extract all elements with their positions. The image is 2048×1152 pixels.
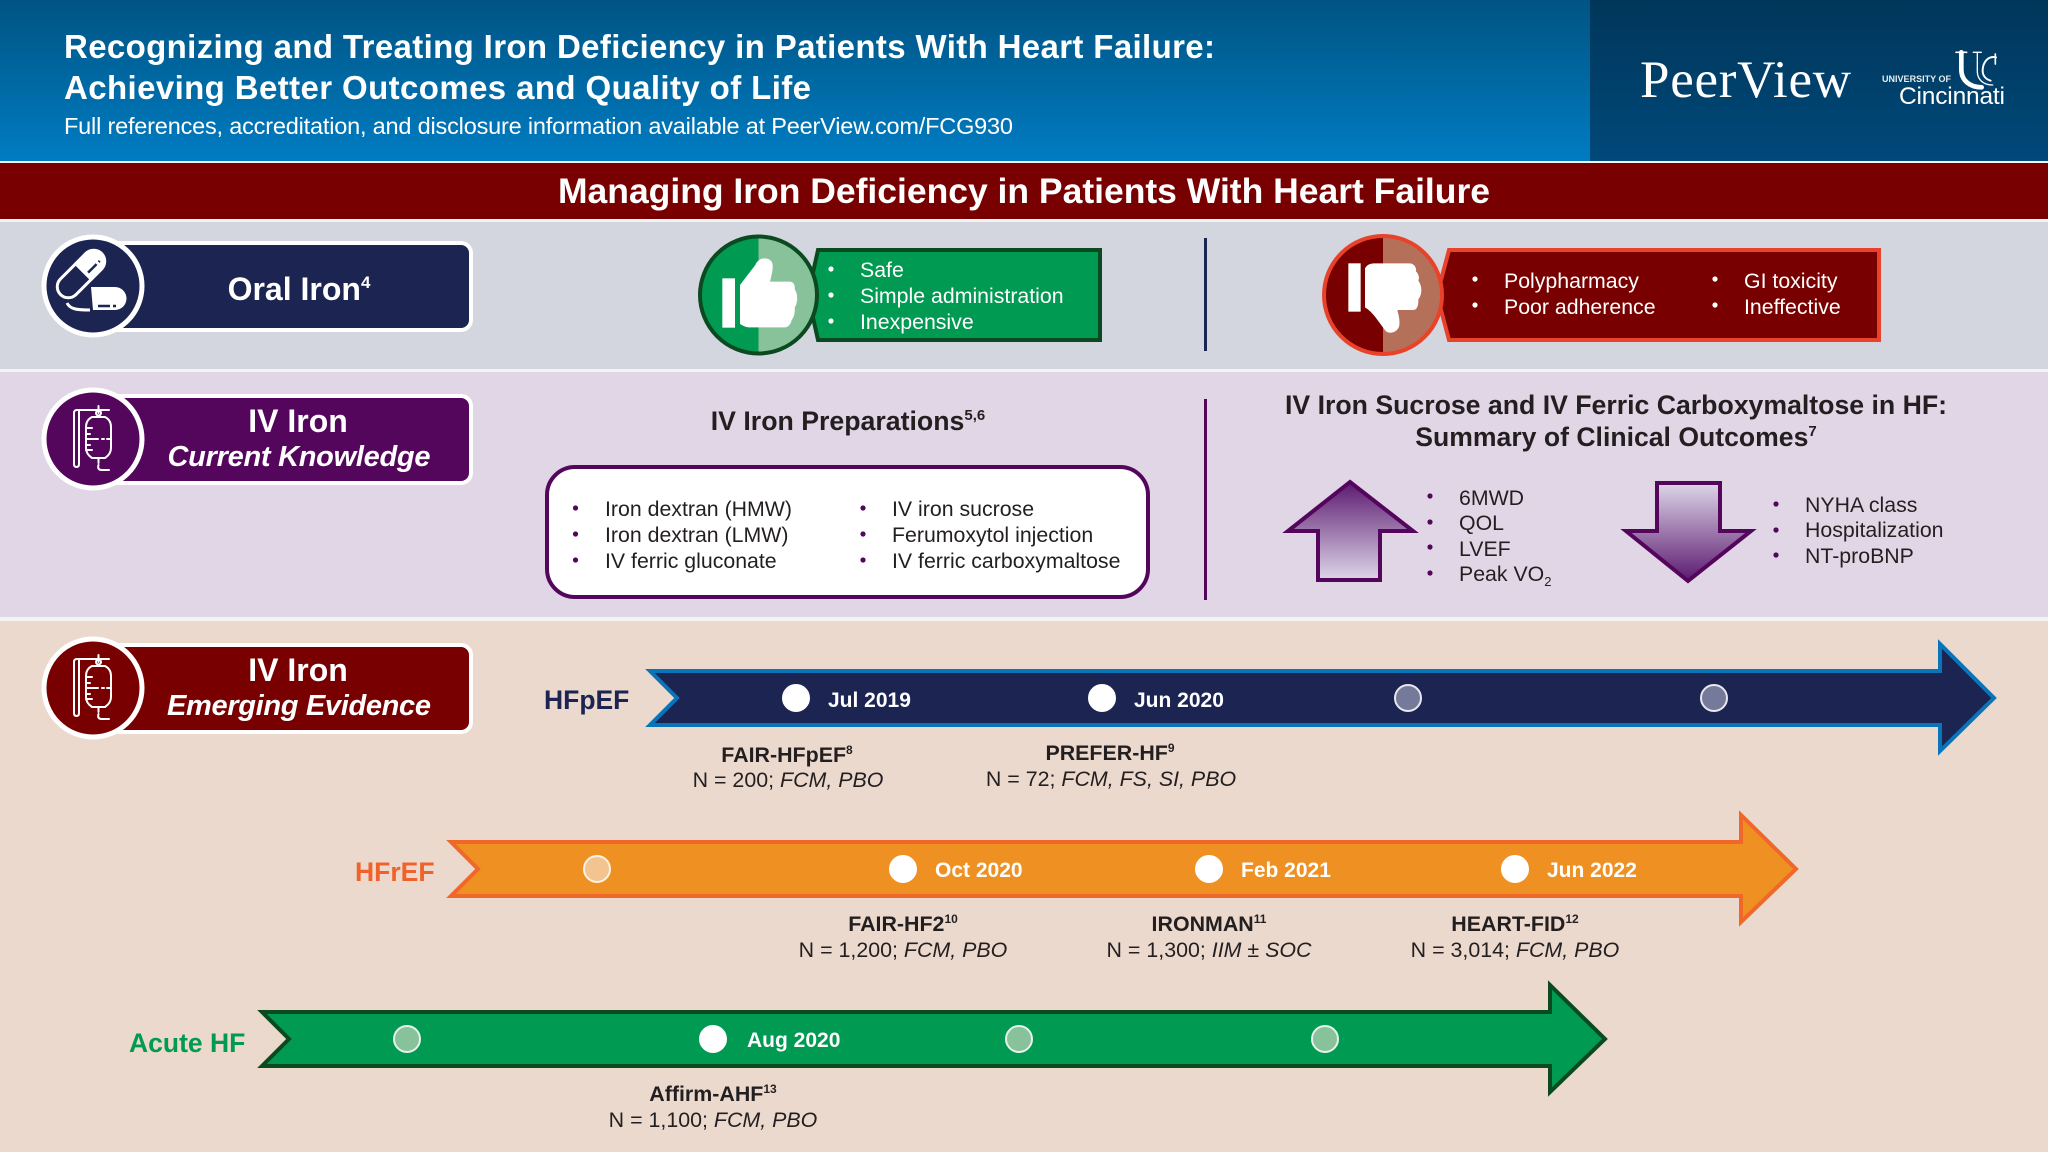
heading: clinical outcomes [1285,390,1947,452]
milestone: Jul 2019 [783,685,911,712]
label text: emerging evidence [167,652,431,722]
subtitle: references note: Full references, accreditation, and disclosure information available at PeerView.com/FCG930 [64,113,1013,139]
icon: IV bag [74,655,111,719]
list: decreased outcomes: NT-proBNP [1805,544,1914,568]
trial: FAIR-HF2: FAIR-HF2 [848,912,944,936]
box: IV iron preparations list: IV ferric carboxymaltose [892,549,1120,573]
milestone: Jun 2020: Jun 2020 [1134,689,1224,712]
trial: IRONMAN: IRONMAN [1152,912,1254,936]
cons: callout box: Polypharmacy [1504,269,1639,293]
milestone: Jun 2022 [1502,856,1637,882]
heading: IV iron preparations: 5,6 [964,407,985,424]
trial: HEART-FID: HEART-FID [1451,912,1565,936]
list: decreased outcomes: Hospitalization [1805,518,1944,542]
trial: FAIR-HF2: N = 1,200; FCM, PBO [799,938,1008,962]
trial: Affirm-AHF: N = 1,100; FCM, PBO [609,1108,818,1132]
timeline: Acute HF [129,985,1605,1132]
pros: callout box [808,250,1100,340]
box: IV iron preparations list [547,467,1148,597]
arrow: HFpEF [650,644,1994,751]
heading: clinical outcomes: 7 [1808,423,1817,440]
trial: IRONMAN: N = 1,300; IIM ± SOC [1107,938,1312,962]
divider [1204,238,1207,351]
list: decreased outcomes: NYHA class [1805,493,1917,517]
milestone: future 2 [1006,1026,1032,1052]
panel: header [0,0,2048,161]
arrow: HFrEF [451,815,1796,922]
label text: emerging evidence: Emerging Evidence [167,690,431,722]
list: increased outcomes: Peak VO [1459,562,1544,586]
label text: IV iron: Current Knowledge [168,441,430,473]
panel: IV iron current knowledge [0,369,2048,617]
label text: IV iron [168,403,430,473]
logo: University of Cincinnati [1882,52,2005,110]
divider [1204,399,1207,600]
trial: FAIR-HFpEF [693,743,884,792]
label pill: IV iron emerging evidence [44,639,471,737]
cons: callout box: Poor adherence [1504,295,1656,319]
heading: clinical outcomes: Summary of Clinical Outcomes [1415,422,1808,452]
trial: PREFER-HF: 9 [1168,741,1175,755]
label text: emerging evidence: IV Iron [248,652,348,688]
milestone: Jul 2019: Jul 2019 [828,689,911,712]
list: increased outcomes: QOL [1459,511,1504,535]
trial: FAIR-HFpEF: N = 200; FCM, PBO [693,768,884,792]
trial: IRONMAN: 11 [1254,912,1267,926]
milestone: Feb 2021: Feb 2021 [1241,859,1331,882]
list: increased outcomes: 6MWD [1459,486,1524,510]
label text: oral iron: Oral Iron [228,271,361,307]
box: IV iron preparations list: Ferumoxytol injection [892,523,1093,547]
box: IV iron preparations list: Iron dextran (LMW) [605,523,788,547]
milestone: Feb 2021 [1196,856,1331,882]
trial: IRONMAN [1107,912,1312,962]
panel: IV iron emerging evidence [0,617,2048,1152]
trial: HEART-FID: N = 3,014; FCM, PBO [1411,938,1620,962]
logo: University of Cincinnati: UNIVERSITY OF [1882,74,1952,84]
cons: callout box: Ineffective [1744,295,1841,319]
label text: oral iron: 4 [361,273,371,292]
milestone: future 2 [1701,685,1727,711]
pros: callout box: Safe [860,258,904,282]
list: decreased outcomes [1773,493,1944,568]
timeline: HFrEF [355,815,1796,962]
milestone: future 1 [1395,685,1421,711]
icon: IV bag [74,406,111,470]
trial: FAIR-HF2 [799,912,1008,962]
trial: Affirm-AHF: Affirm-AHF [649,1082,763,1106]
title: Achieving Better Outcomes and Quality of Life [64,69,811,106]
milestone: future 0 [584,856,610,882]
label pill: IV iron current knowledge [44,390,471,488]
trial: PREFER-HF [986,741,1236,791]
logo: PeerView: PeerView [1640,51,1852,109]
arrow: Acute HF [262,985,1605,1092]
row label: HFpEF: HFpEF [544,685,629,715]
milestone: future 1 [394,1026,420,1052]
row label: Acute HF: Acute HF [129,1028,245,1058]
milestone: Jun 2022: Jun 2022 [1547,859,1637,882]
trial: Affirm-AHF: 13 [763,1082,777,1096]
milestone: Oct 2020 [890,856,1023,882]
heading: IV iron preparations: IV Iron Preparations [711,406,964,436]
panel: oral iron [0,222,2048,369]
icon: capsules [52,244,126,310]
heading: clinical outcomes: IV Iron Sucrose and IV Ferric Carboxymaltose in HF: [1285,390,1947,420]
milestone: Jun 2020 [1089,685,1224,712]
pros: callout box: Simple administration [860,284,1064,308]
box: IV iron preparations list: Iron dextran (HMW) [605,497,792,521]
icon: thumbs up [700,236,817,354]
milestone: Aug 2020: Aug 2020 [747,1029,840,1052]
list: increased outcomes: LVEF [1459,537,1511,561]
logo: University of Cincinnati: Cincinnati [1899,83,2005,110]
title: Recognizing and Treating Iron Deficiency in Patients With Heart Failure: [64,28,1215,65]
list: increased outcomes [1427,486,1551,589]
timeline: HFpEF [544,644,1994,792]
trial: FAIR-HF2: 10 [944,912,958,926]
title [64,28,1215,106]
trial: PREFER-HF: N = 72; FCM, FS, SI, PBO [986,767,1236,791]
list: increased outcomes: 2 [1544,574,1551,589]
trial: FAIR-HFpEF: FAIR-HFpEF [721,743,846,767]
panel: section title band [0,161,2048,222]
milestone: Oct 2020: Oct 2020 [935,859,1023,882]
trial: HEART-FID [1411,912,1620,962]
icon: thumbs down [1324,236,1442,354]
milestone: Aug 2020 [700,1026,840,1052]
cons: callout box: GI toxicity [1744,269,1838,293]
trial: FAIR-HFpEF: 8 [846,743,853,757]
trial: Affirm-AHF [609,1082,818,1132]
arrow: increased outcomes [1288,482,1413,580]
label text: IV iron: IV Iron [248,403,348,439]
trial: HEART-FID: 12 [1565,912,1579,926]
milestone: future 3 [1312,1026,1338,1052]
row label: HFrEF: HFrEF [355,857,434,887]
trial: PREFER-HF: PREFER-HF [1045,741,1168,765]
box: IV iron preparations list: IV iron sucrose [892,497,1034,521]
arrow: decreased outcomes [1626,483,1751,581]
heading: managing iron deficiency: Managing Iron Deficiency in Patients With Heart Failure [558,171,1490,211]
box: IV iron preparations list: IV ferric gluconate [605,549,777,573]
cons: callout box [1437,250,1879,340]
pros: callout box: Inexpensive [860,310,974,334]
label pill: oral iron [44,237,471,335]
